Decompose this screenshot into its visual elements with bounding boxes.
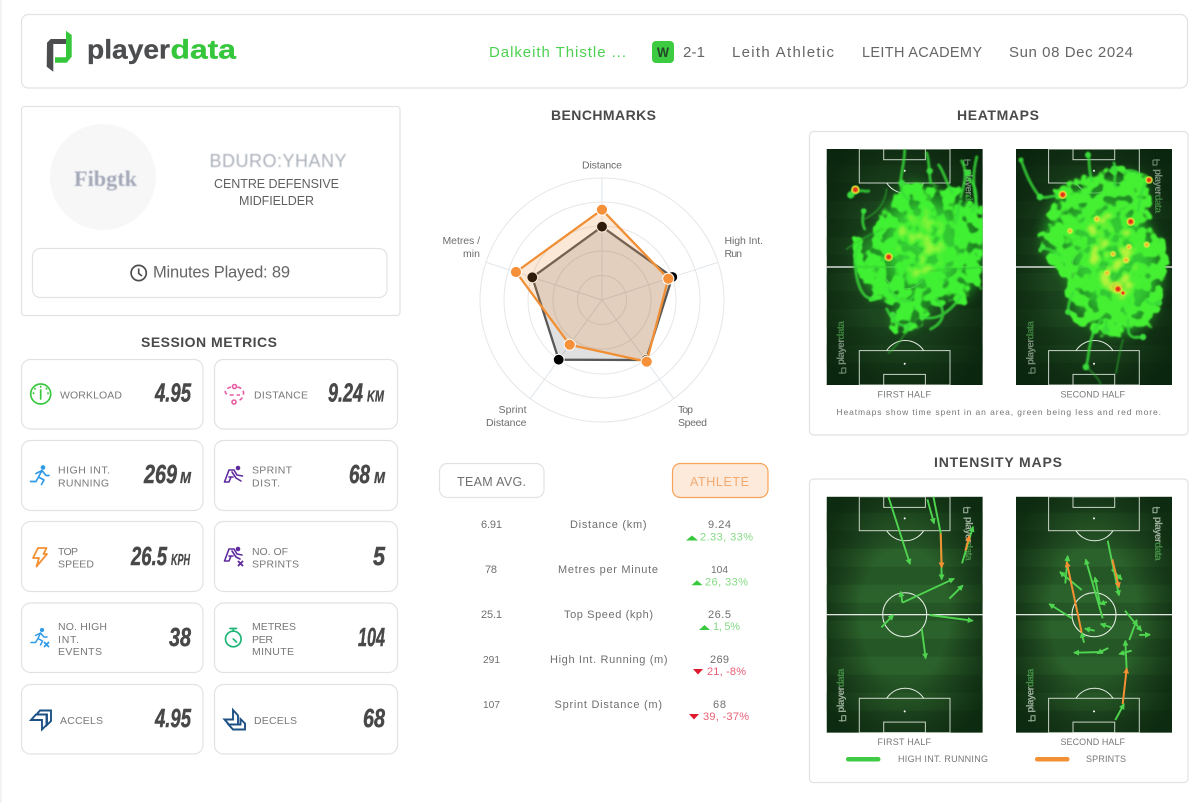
row: distance [481,519,753,544]
row: metres per minute: Metres per Minute [558,564,658,576]
result badge [652,41,674,63]
legend [846,754,1126,764]
row: metres per minute: 26, 33% [705,576,748,588]
metric: metres per minute [214,603,398,672]
metric: top speed: 26.5 [130,541,167,571]
metric: top speed: KPH [171,552,190,569]
intensity map labels [878,737,1126,747]
button: athlete: ATHLETE [690,475,749,489]
row: top speed [481,609,740,633]
metric: metres per minute: MINUTE [252,646,294,658]
match details: Leith Athletic [732,44,834,61]
metric: number of high intensity events: EVENTS [58,646,102,658]
minutes played [32,248,387,298]
metric: number of high intensity events: NO. HIGH [58,621,107,633]
metric: metres per minute: PER [252,634,273,646]
heatmap: first half [827,149,997,385]
row: metres per minute: 104 [711,565,728,576]
metric: high intensity running: HIGH INT. [58,464,110,476]
row: high intensity running: 269 [710,654,729,666]
watermark: playerdata [836,321,847,365]
radar chart [442,160,763,429]
metric: workload [22,360,203,429]
match details: 2-1 [683,44,705,61]
metric: number of sprints: NO. OF [252,546,288,558]
watermark: player data [963,517,974,561]
radar labels: Distance [486,417,527,429]
metric: number of high intensity events: 38 [169,622,191,652]
radar labels: min [463,248,480,260]
metric: metres per minute: 104 [358,622,385,652]
metric: workload: 4.95 [154,378,191,408]
metric: number of sprints [214,522,398,592]
metric: high intensity running: 269 [143,459,177,489]
metric: accels [22,684,203,754]
match details [489,41,1133,63]
legend: SPRINTS [1086,754,1126,764]
logo: playerdata: player [87,34,171,64]
watermark: player data [1152,517,1163,561]
logo: playerdata: data [170,34,237,64]
metric: decels: 68 [363,703,385,733]
header panel [22,14,1188,88]
heading: heatmaps: HEATMAPS [957,107,1039,123]
heading: session metrics: SESSION METRICS [141,334,277,350]
row: high intensity running: High Int. Running (m) [550,654,668,666]
panel: intensity maps [810,479,1188,782]
row: distance: Distance (km) [570,519,646,531]
run arrows [881,497,973,658]
metric: accels: 4.95 [154,703,191,733]
row: high intensity running [483,654,746,678]
watermark: player data [1152,169,1163,213]
metric: decels: DECELS [254,715,297,727]
metric: accels: ACCELS [60,715,103,727]
watermark: playerdata [1026,668,1036,713]
row: sprint distance [483,699,749,723]
metric: distance: DISTANCE [254,390,308,402]
match details: LEITH ACADEMY [862,45,982,61]
row: sprint distance: 107 [483,700,500,711]
team average series [527,221,678,365]
avatar: Fibgtk [74,166,138,191]
row: high intensity running: 291 [483,655,500,666]
heading: benchmarks: BENCHMARKS [551,107,656,123]
metric: top speed [22,522,203,592]
metric: number of sprints: SPRINTS [252,559,299,571]
metric: distance: 9.24 [328,378,363,408]
metric: number of high intensity events [22,603,203,672]
heading: intensity maps: INTENSITY MAPS [934,454,1062,470]
metric: workload: WORKLOAD [60,390,122,402]
metric: sprint distance [214,440,398,510]
athlete series [510,204,674,367]
row: high intensity running: 21, -8% [707,666,746,678]
heatmap: second half [1016,149,1174,385]
athlete name and position: BDURO:YHANY [210,151,346,171]
metric: number of high intensity events: INT. [58,634,79,646]
athlete name and position: MIDFIELDER [239,194,314,208]
metric: high intensity running [22,440,203,510]
radar labels: Run [724,248,742,260]
radar labels: Speed [678,417,707,429]
watermark [1026,507,1163,722]
avatar [50,124,156,230]
watermark [836,159,974,374]
metric: sprint distance: DIST. [252,478,280,490]
radar labels: Metres / [442,235,480,247]
heatmap labels [836,390,1161,417]
radar labels: Top [678,404,693,416]
row: sprint distance: Sprint Distance (m) [554,699,662,711]
metric: distance [214,360,398,429]
comparison table [481,519,753,723]
result badge: W [657,44,670,60]
button: athlete [672,464,768,498]
row: top speed: 25.1 [481,609,502,621]
logo: playerdata [47,31,237,72]
row: top speed: 1, 5% [713,621,740,633]
row: sprint distance: 39, -37% [703,711,749,723]
metric: sprint distance: SPRINT [252,464,293,476]
intensity map labels: SECOND HALF [1060,737,1126,747]
metric: number of sprints: 5 [373,541,385,571]
heatmap labels: SECOND HALF [1060,390,1126,400]
button: team average: TEAM AVG. [457,475,526,489]
radar labels: Sprint [498,404,527,416]
metric: distance: KM [367,389,384,406]
intensity map labels: FIRST HALF [878,737,932,747]
athlete name and position [210,151,346,208]
legend: HIGH INT. RUNNING [898,754,988,764]
button: team average [440,464,544,498]
athlete name and position: CENTRE DEFENSIVE [214,177,339,191]
panel: heatmaps [810,132,1188,435]
metric: high intensity running: RUNNING [58,478,109,490]
panel: athlete profile [22,106,400,316]
minutes played: Minutes Played: 89 [153,264,290,282]
watermark: playerdata [836,668,847,713]
radar labels: Distance [582,160,622,172]
radar labels: High Int. [724,235,763,247]
watermark [836,507,974,722]
heatmap labels: Heatmaps show time spent in an area, green being less and red more. [836,407,1161,417]
row: top speed: Top Speed (kph) [564,609,653,621]
row: metres per minute: 78 [485,564,497,576]
run arrows [1049,541,1150,720]
radar labels [442,160,763,429]
row: distance: 9.24 [708,519,731,531]
row: sprint distance: 68 [713,699,726,711]
intensity map: second half [1016,497,1172,733]
heatmap labels: FIRST HALF [878,390,932,400]
row: metres per minute [485,564,748,588]
metric: top speed: SPEED [58,559,94,571]
watermark: player data [963,169,974,213]
row: top speed: 26.5 [708,609,731,621]
row: distance: 6.91 [481,519,502,531]
metric: high intensity running: M [180,470,192,487]
watermark [1026,159,1163,374]
metric: metres per minute: METRES [252,621,296,633]
metric: top speed: TOP [58,546,78,558]
metric: decels [214,684,398,754]
metric: sprint distance: 68 [349,459,370,489]
match details: Sun 08 Dec 2024 [1009,44,1133,61]
metric: sprint distance: M [374,470,386,487]
row: distance: 2.33, 33% [700,532,753,544]
match details: Dalkeith Thistle ... [489,44,626,61]
intensity map: first half [827,497,983,733]
watermark: playerdata [1026,321,1036,365]
